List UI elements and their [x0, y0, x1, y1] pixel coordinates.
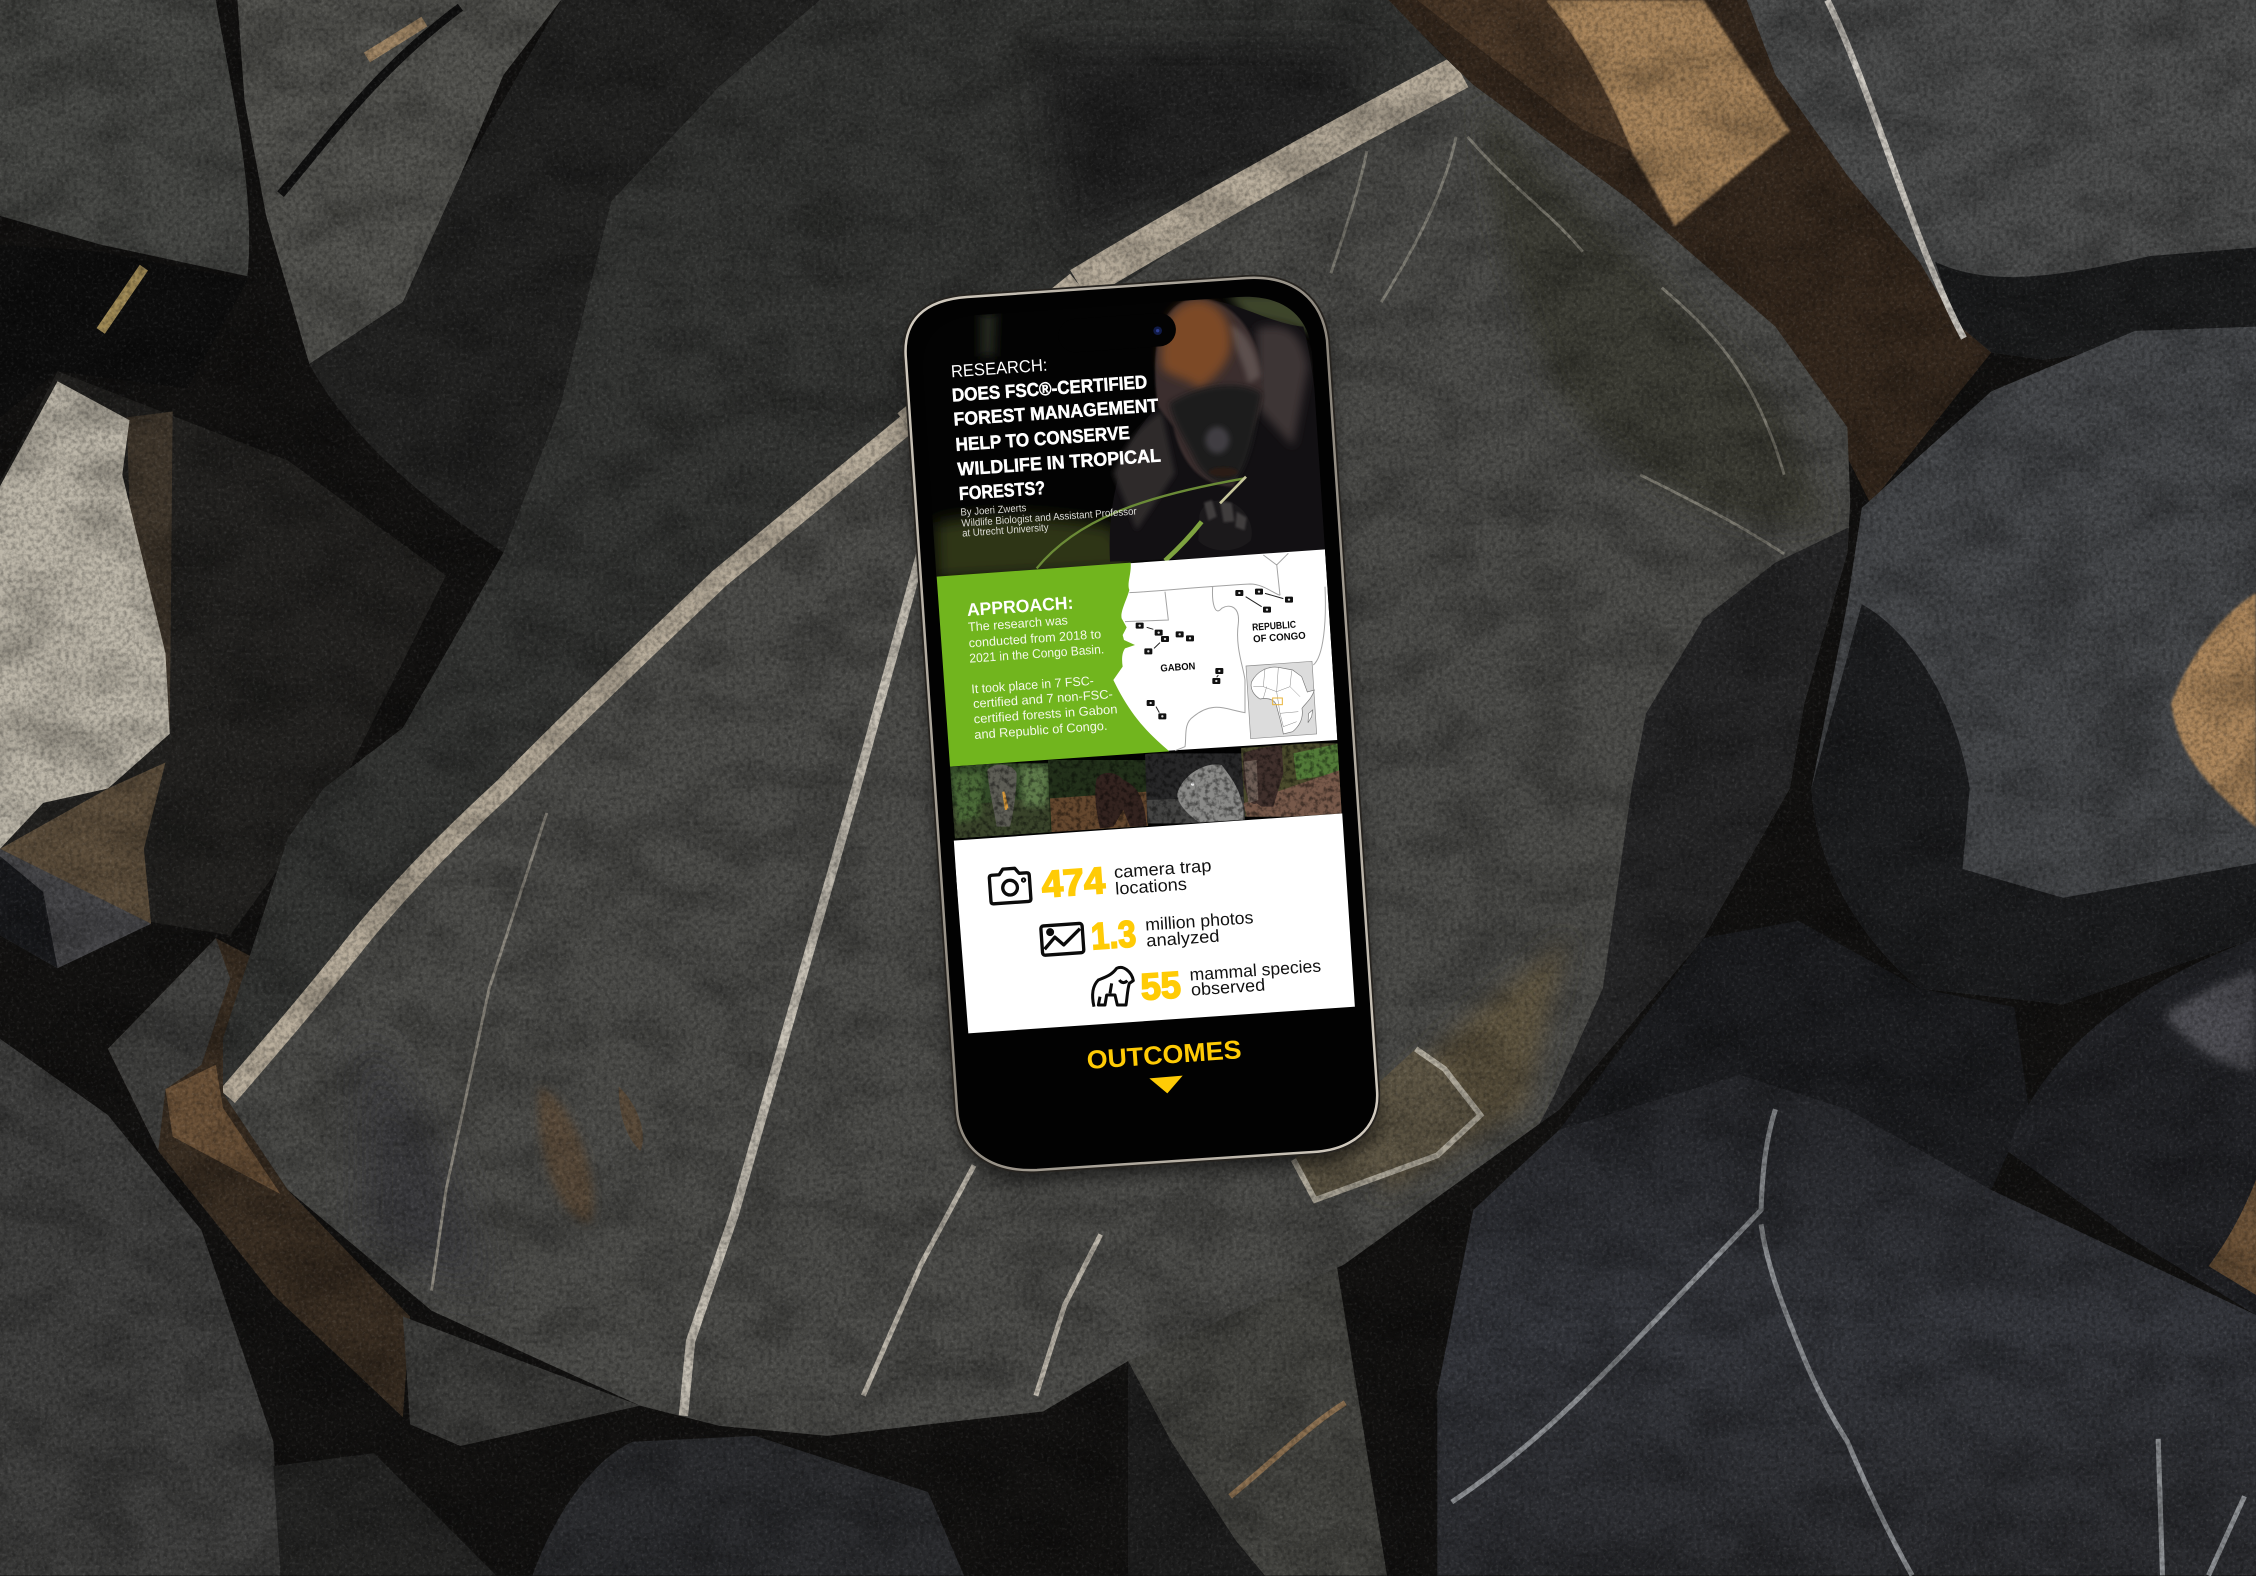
map labels: OF CONGO	[1253, 631, 1306, 645]
stat: million photos analyzed: 1.3	[1090, 912, 1137, 957]
head and crown	[1155, 299, 1263, 487]
rock: top right boulder	[1747, 0, 2256, 360]
title: RESEARCH:	[950, 355, 1048, 381]
phone: body and frame	[906, 278, 1377, 1170]
photo: chimpanzee	[1048, 760, 1148, 833]
panel: approach and map	[937, 549, 1337, 767]
panel: wildlife camera trap photos	[947, 740, 1347, 840]
title	[950, 355, 1161, 504]
photo: elephant	[947, 763, 1052, 840]
stat: million photos analyzed: analyzed	[1146, 926, 1220, 951]
photo: leopard	[1145, 753, 1245, 823]
outcomes heading: OUTCOMES	[1086, 1034, 1242, 1075]
byline: By Joeri Zwerts	[960, 503, 1027, 519]
rock: lower right dark	[1560, 921, 2256, 1315]
gorilla	[1110, 299, 1327, 562]
map labels: REPUBLIC	[1252, 620, 1296, 634]
phone screen	[913, 293, 1356, 1093]
stat: million photos analyzed	[1041, 907, 1254, 957]
stat: camera trap locations: camera trap	[1113, 855, 1212, 882]
title: WILDLIFE IN TROPICAL	[957, 444, 1161, 480]
rock: bottom left	[0, 1039, 281, 1575]
approach text: and Republic of Congo.	[974, 719, 1108, 742]
inset map of Africa	[1246, 661, 1317, 739]
grass stem	[1037, 477, 1246, 568]
rock: bottom centre pieces	[273, 1265, 1387, 1575]
stat: mammal species observed: mammal species	[1189, 955, 1322, 985]
approach text	[966, 593, 1118, 742]
rock: left with white quartz	[0, 371, 446, 968]
rock: right boulder	[1811, 327, 2256, 1004]
stat: million photos analyzed: million photos	[1145, 907, 1254, 935]
byline: Wildlife Biologist and Assistant Professor	[961, 506, 1138, 530]
map labels: GABON	[1160, 661, 1196, 675]
approach text: It took place in 7 FSC-	[971, 674, 1094, 696]
sand with shadows, top right	[1387, 0, 1991, 504]
title: FORESTS?	[958, 477, 1046, 504]
panel: statistics	[953, 813, 1356, 1093]
main quartz vein	[227, 424, 906, 1096]
arrow: down	[1149, 1076, 1183, 1093]
approach text: The research was	[968, 613, 1068, 634]
camera trap markers	[1136, 589, 1293, 719]
hand	[1198, 500, 1252, 550]
dark upper side of boulder	[223, 0, 1446, 1100]
stat: mammal species observed	[1093, 955, 1322, 1008]
title: HELP TO CONSERVE	[955, 422, 1131, 455]
stat: mammal species observed: observed	[1190, 975, 1266, 1000]
photo: antelope in forest	[1241, 743, 1343, 817]
panel: research hero photo	[933, 296, 1325, 581]
approach text: APPROACH:	[966, 593, 1074, 620]
fur body	[1110, 299, 1327, 562]
approach text: certified and 7 non-FSC-	[973, 687, 1113, 711]
rock: upper left with shadow	[237, 0, 820, 552]
panel: map background	[1100, 549, 1337, 755]
approach text: certified forests in Gabon	[973, 702, 1118, 726]
map labels	[1160, 620, 1306, 675]
country borders	[1125, 553, 1325, 751]
face	[1169, 385, 1262, 483]
forest backdrop	[935, 293, 1313, 580]
rock: bottom right with white veins	[1437, 1075, 2256, 1575]
dark crevice with wood splinter	[0, 245, 247, 417]
byline	[960, 503, 1138, 540]
phone: shadow	[906, 290, 1377, 1182]
lichen patch with white rim	[1293, 1049, 1481, 1200]
camera cutout	[1057, 312, 1177, 353]
byline: at Utrecht University	[962, 523, 1050, 540]
stat: camera trap locations	[989, 855, 1212, 905]
stat: camera trap locations: locations	[1115, 874, 1188, 899]
stat: mammal species observed: 55	[1139, 963, 1182, 1008]
approach text: conducted from 2018 to	[968, 627, 1102, 650]
green approach panel	[937, 563, 1169, 767]
rock: top left	[0, 0, 249, 276]
approach text: 2021 in the Congo Basin.	[969, 642, 1105, 666]
title: DOES FSC®-CERTIFIED	[951, 371, 1148, 406]
lower veins	[683, 554, 921, 1416]
rock: large central boulder	[223, 0, 1850, 1436]
title: FOREST MANAGEMENT	[953, 394, 1160, 430]
rock and sand: lower left	[108, 938, 410, 1417]
stat: camera trap locations: 474	[1040, 859, 1107, 905]
